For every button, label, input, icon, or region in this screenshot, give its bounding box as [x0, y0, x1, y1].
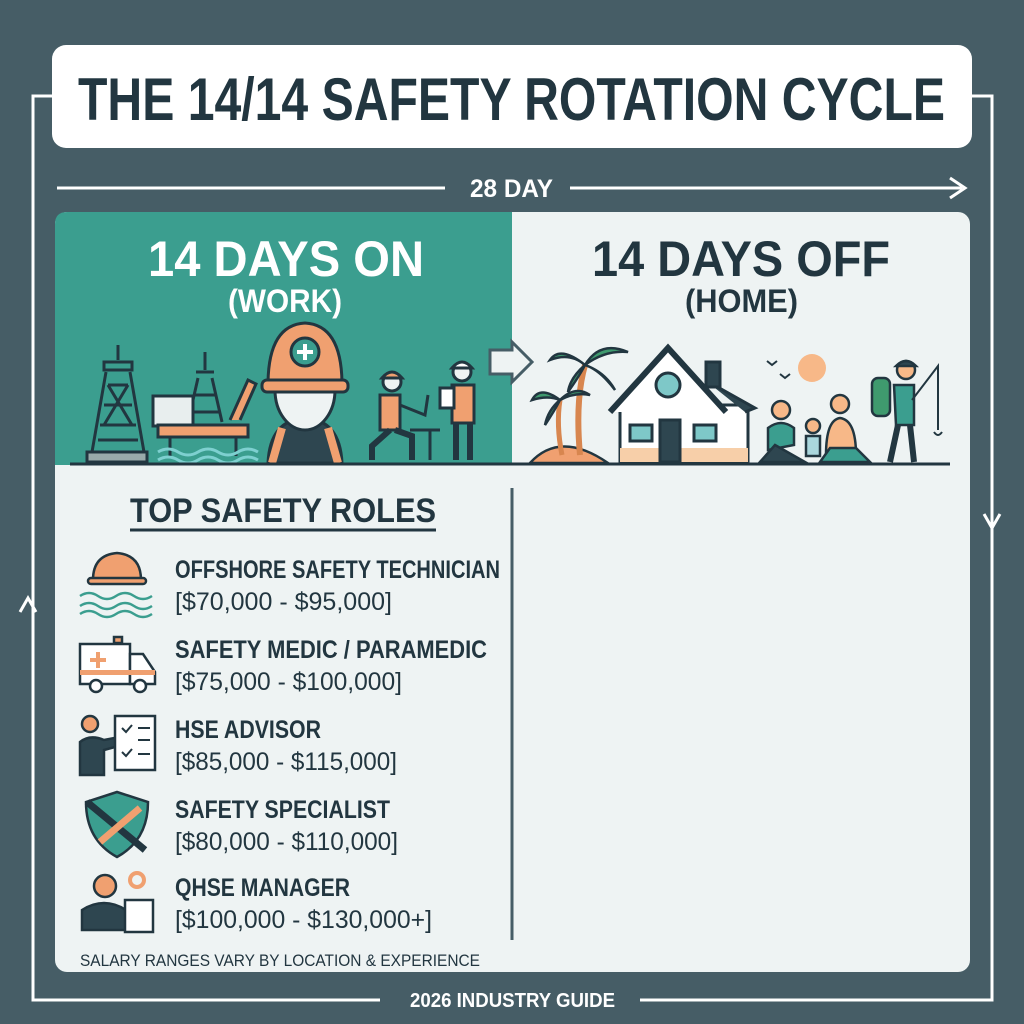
role: offshore safety technician: OFFSHORE SAFETY TECHNICIAN	[175, 556, 500, 584]
icon: house	[610, 348, 755, 462]
main panel	[55, 212, 970, 972]
28 day arrow: 28 DAY	[470, 175, 553, 203]
28 day arrow	[57, 175, 965, 203]
role: offshore safety technician: [$70,000 - $95,000]	[175, 588, 392, 616]
panel: work (teal): 14 DAYS ON	[148, 231, 424, 287]
2026 footer: 2026 INDUSTRY GUIDE	[410, 990, 615, 1012]
role: safety specialist: [$80,000 - $110,000]	[175, 828, 398, 856]
icon: safety worker head	[262, 323, 348, 463]
icon: oil derrick	[87, 345, 147, 462]
icon: hiker	[872, 361, 942, 462]
panel: home: (HOME)	[685, 283, 798, 319]
arrow: to home	[490, 342, 532, 382]
panel: work (teal): (WORK)	[228, 283, 342, 319]
role: safety medic	[80, 636, 487, 696]
title	[52, 45, 972, 148]
icon: family	[760, 395, 870, 462]
icon: kneeling worker & engineer	[372, 362, 474, 460]
role: offshore safety technician	[80, 553, 500, 617]
role: hse advisor: HSE ADVISOR	[175, 716, 321, 744]
role: hse advisor: [$85,000 - $115,000]	[175, 748, 397, 776]
role: safety medic: [$75,000 - $100,000]	[175, 668, 402, 696]
icon: offshore platform	[153, 352, 258, 463]
role: hse advisor	[80, 716, 397, 776]
role: qhse manager: [$100,000 - $130,000+]	[175, 906, 432, 934]
role: safety specialist: SAFETY SPECIALIST	[175, 796, 390, 824]
icon: sun & birds	[767, 354, 826, 382]
icon: palm trees	[530, 348, 628, 463]
footnote: SALARY RANGES VARY BY LOCATION & EXPERIENCE	[80, 951, 480, 970]
role: safety specialist	[86, 792, 398, 857]
role: qhse manager	[82, 873, 432, 934]
role: safety medic: SAFETY MEDIC / PARAMEDIC	[175, 636, 487, 664]
panel: home	[592, 231, 890, 319]
panel: home: 14 DAYS OFF	[592, 231, 890, 287]
panel: work (teal)	[55, 212, 512, 465]
heading: top safety roles: TOP SAFETY ROLES	[130, 492, 436, 530]
role: qhse manager: QHSE MANAGER	[175, 874, 350, 902]
